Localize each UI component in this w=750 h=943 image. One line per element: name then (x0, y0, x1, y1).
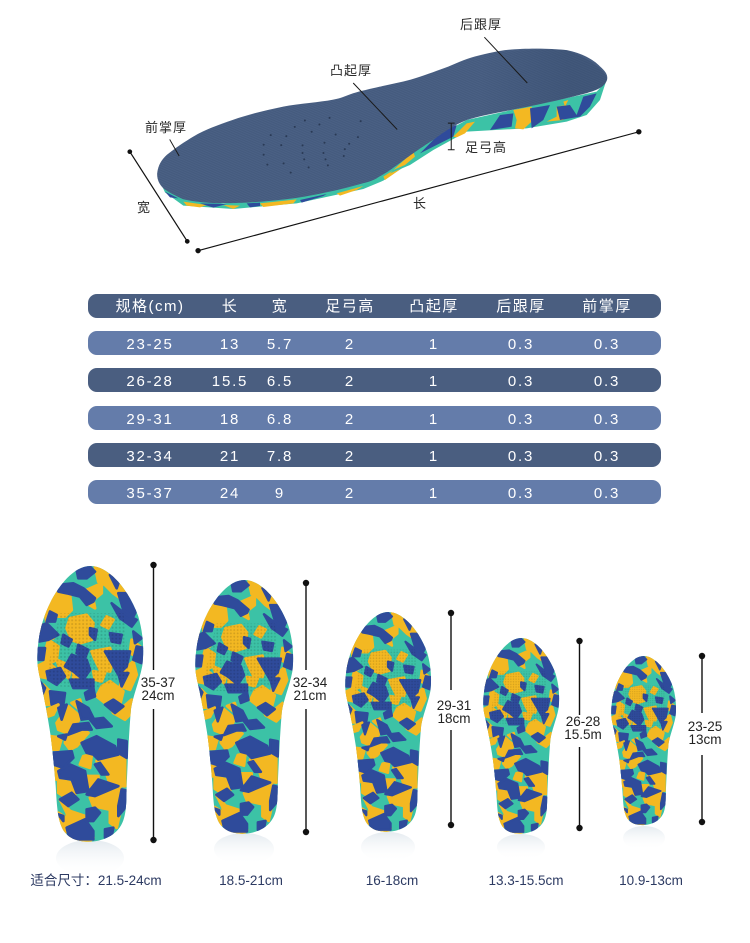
fit size captions: 适合尺寸：21.5-24cm (30, 873, 162, 888)
insole size 29-31: 29-31 (437, 698, 471, 713)
label: bump thickness: 凸起厚 (330, 63, 372, 78)
fit size captions: 18.5-21cm (219, 873, 283, 888)
row 29-31: 29-31 (126, 411, 174, 428)
row 32-34: 1 (429, 448, 439, 465)
row 35-37: 35-37 (126, 485, 174, 502)
label: arch height: 足弓高 (465, 140, 507, 155)
table header: 足弓高 (325, 298, 375, 315)
row 32-34: 0.3 (594, 448, 620, 465)
row 32-34: 0.3 (508, 448, 534, 465)
label: heel thickness: 后跟厚 (460, 17, 502, 32)
insole size 29-31 (345, 610, 471, 862)
table header (88, 294, 661, 318)
row 23-25: 0.3 (594, 336, 620, 353)
row 29-31: 0.3 (508, 411, 534, 428)
row 26-28: 6.5 (267, 373, 293, 390)
leader lines (170, 37, 527, 156)
insole side edge: arch and heel (390, 82, 606, 173)
row 26-28: 1 (429, 373, 439, 390)
row 32-34: 21 (220, 448, 240, 465)
row 23-25: 0.3 (508, 336, 534, 353)
row 23-25: 1 (429, 336, 439, 353)
table header: 前掌厚 (582, 298, 632, 315)
insole size 35-37 (37, 562, 175, 876)
row 23-25: 13 (220, 336, 240, 353)
table header: 后跟厚 (496, 298, 546, 315)
insole size 32-34: 21cm (293, 688, 327, 703)
row 26-28: 15.5 (212, 373, 248, 390)
row 35-37: 9 (275, 485, 285, 502)
table header: 宽 (272, 298, 288, 315)
row 35-37: 0.3 (508, 485, 534, 502)
length and width lines (127, 129, 642, 253)
row 35-37: 0.3 (594, 485, 620, 502)
fit size captions: 13.3-15.5cm (488, 873, 564, 888)
insole size 23-25 (611, 653, 722, 850)
size table (88, 294, 661, 504)
insole size 35-37: 24cm (141, 688, 175, 703)
row 32-34 (88, 443, 661, 467)
insole size 32-34 (195, 580, 328, 865)
insole size 23-25: 13cm (688, 732, 722, 747)
insole size 26-28: 15.5m (564, 727, 602, 742)
row 32-34: 7.8 (267, 448, 293, 465)
insole size 26-28: 26-28 (566, 714, 600, 729)
row 23-25: 23-25 (126, 336, 174, 353)
row 32-34: 32-34 (126, 448, 174, 465)
insole side edge: forefoot (162, 153, 408, 209)
row 23-25: 2 (345, 336, 355, 353)
row 35-37: 24 (220, 485, 240, 502)
ventilation holes (263, 117, 362, 174)
row 29-31: 0.3 (594, 411, 620, 428)
table header: 凸起厚 (409, 298, 459, 315)
row 23-25 (88, 331, 661, 355)
row 32-34: 2 (345, 448, 355, 465)
label: length: 长 (413, 196, 427, 211)
row 35-37 (88, 480, 661, 504)
row 29-31: 1 (429, 411, 439, 428)
insole fabric top (157, 49, 607, 203)
insole size 32-34: 32-34 (293, 675, 328, 690)
fit size captions (30, 873, 683, 888)
row 35-37: 1 (429, 485, 439, 502)
row 29-31: 6.8 (267, 411, 293, 428)
row 26-28: 0.3 (508, 373, 534, 390)
row 35-37: 2 (345, 485, 355, 502)
table header: 长 (222, 298, 238, 315)
table header: 规格(cm) (116, 298, 184, 315)
fit size captions: 16-18cm (366, 873, 418, 888)
insole size 23-25: 23-25 (688, 719, 722, 734)
heel shading (353, 49, 607, 176)
row 26-28 (88, 368, 661, 392)
row 29-31: 2 (345, 411, 355, 428)
top insole photo (127, 37, 642, 253)
label: width: 宽 (137, 200, 151, 215)
label: forefoot thickness: 前掌厚 (145, 120, 187, 135)
row 23-25: 5.7 (267, 336, 293, 353)
row 26-28: 2 (345, 373, 355, 390)
row 29-31: 18 (220, 411, 240, 428)
insole size 35-37: 35-37 (141, 675, 175, 690)
insole size 29-31: 18cm (437, 711, 471, 726)
row 26-28: 26-28 (126, 373, 174, 390)
row 29-31 (88, 406, 661, 430)
insole size 26-28 (483, 638, 602, 860)
row 26-28: 0.3 (594, 373, 620, 390)
fit size captions: 10.9-13cm (619, 873, 683, 888)
